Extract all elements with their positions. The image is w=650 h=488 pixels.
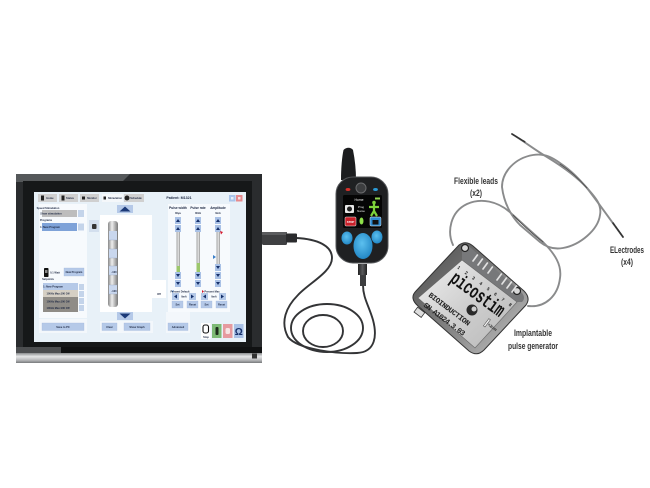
bottom buttons: Clear bbox=[106, 325, 113, 329]
top buttons bbox=[346, 183, 378, 193]
panel: stimulation sliders: 0mA bbox=[215, 211, 221, 215]
preset controls: Present Default bbox=[170, 290, 190, 294]
status icons: Ω bbox=[235, 327, 243, 338]
panel: electrode view: Off bbox=[157, 292, 161, 296]
tab bar: Schedule bbox=[130, 196, 142, 200]
panel: program list: Show stimulation bbox=[40, 212, 62, 216]
panel: program list: 1: New Program bbox=[43, 284, 64, 288]
electrode lead cylinder: -100 bbox=[111, 270, 117, 274]
controller screen: Prog bbox=[358, 205, 364, 209]
tab bar: Status bbox=[66, 196, 75, 200]
implantable pulse generator bbox=[413, 243, 528, 354]
panel: program list: New Program bbox=[66, 270, 83, 274]
power button bbox=[252, 354, 257, 358]
preset controls: 0mA bbox=[181, 294, 187, 298]
slider: pulse width bbox=[175, 217, 181, 287]
controller screen: Name bbox=[357, 209, 365, 213]
panel: program list: 0.1 Watt bbox=[50, 270, 60, 274]
panel: stimulation sliders: 30μs bbox=[175, 211, 182, 215]
monitor bbox=[16, 174, 262, 363]
label: flexible leads: (x2) bbox=[470, 188, 482, 199]
software screen bbox=[34, 192, 246, 342]
tab bar: Home bbox=[46, 196, 54, 200]
logo mark bbox=[466, 304, 478, 316]
device text: BIOINDUCTION bbox=[426, 292, 471, 328]
monitor silver bezel bar bbox=[16, 353, 262, 363]
preset controls bbox=[170, 290, 227, 308]
bottom buttons bbox=[39, 312, 190, 333]
label: flexible leads: Flexible leads bbox=[454, 176, 498, 187]
device text: picostim bbox=[445, 268, 509, 323]
panel: program list: 1: New Program bbox=[40, 225, 61, 229]
preset controls: 0mA bbox=[211, 294, 217, 298]
flexible leads and electrodes bbox=[450, 134, 623, 306]
controller screen: Home bbox=[354, 198, 364, 202]
preset controls: Reset bbox=[218, 302, 225, 306]
panel: stimulation sliders: Pulse rate bbox=[190, 206, 206, 210]
USB plug bbox=[262, 232, 297, 245]
bottom buttons: Advanced bbox=[172, 325, 185, 329]
status icons: Stop bbox=[203, 335, 209, 339]
panel: program list: 100Hz Max:100 Off bbox=[47, 306, 70, 310]
panel: stimulation sliders: Amplitude bbox=[210, 206, 226, 210]
patient title: Patient: M1321 bbox=[166, 196, 192, 200]
label: implantable pulse generator: pulse generator bbox=[508, 341, 558, 352]
label: electrodes: (x4) bbox=[621, 257, 633, 268]
antenna bbox=[341, 148, 356, 180]
device text bbox=[421, 265, 513, 339]
status icons bbox=[201, 323, 244, 339]
panel: stimulation sliders bbox=[168, 204, 230, 312]
panel: program list bbox=[37, 204, 87, 318]
bottom buttons: Save to PC bbox=[56, 325, 70, 329]
window buttons bbox=[229, 195, 242, 202]
tab bar: Stimulation bbox=[108, 196, 122, 200]
scale bar: ≈2cm bbox=[487, 322, 498, 332]
panel: program list: 100Hz Max:100 Off bbox=[47, 300, 70, 304]
electrode lead cylinder bbox=[108, 221, 118, 307]
generator face bbox=[418, 260, 517, 348]
slider: pulse rate bbox=[195, 217, 201, 287]
connector band bbox=[462, 245, 524, 302]
panel: stimulation sliders: Pulse width bbox=[169, 206, 187, 210]
blue buttons bbox=[342, 230, 382, 259]
preset controls: Set bbox=[175, 302, 180, 306]
controller body bbox=[336, 177, 388, 263]
controller screen bbox=[343, 195, 382, 228]
corner tab bbox=[414, 307, 425, 317]
panel: program list: Programs bbox=[40, 218, 53, 222]
preset controls: Reset bbox=[189, 302, 196, 306]
panel: program list: Speed Stimulation bbox=[37, 206, 60, 210]
label: implantable pulse generator: Implantable bbox=[514, 328, 552, 339]
panel: stimulation sliders: 30Hz bbox=[195, 211, 202, 215]
generator case bbox=[413, 243, 528, 354]
device text: 1 2 3 4 5 6 7 8 bbox=[456, 265, 513, 308]
electrode lead cylinder: -100 bbox=[111, 289, 117, 293]
controller cable plug bbox=[358, 264, 367, 286]
device text: SN A1024.3.03 bbox=[421, 302, 466, 339]
handheld controller bbox=[336, 148, 388, 286]
panel: electrode view bbox=[89, 205, 166, 320]
connector block screws bbox=[462, 244, 520, 294]
preset controls: Set bbox=[204, 302, 209, 306]
USB cable bbox=[284, 238, 375, 353]
controller screen: STOP bbox=[347, 220, 354, 224]
bottom buttons: Show Graph bbox=[129, 325, 145, 329]
panel: program list: 100Hz Max:100 Off bbox=[47, 292, 70, 296]
slider: amplitude bbox=[213, 217, 223, 287]
tab bar bbox=[38, 194, 144, 202]
tab bar: Monitor bbox=[87, 196, 97, 200]
preset controls: Present Max bbox=[204, 290, 220, 294]
panel: program list: Setpoints bbox=[42, 277, 54, 281]
